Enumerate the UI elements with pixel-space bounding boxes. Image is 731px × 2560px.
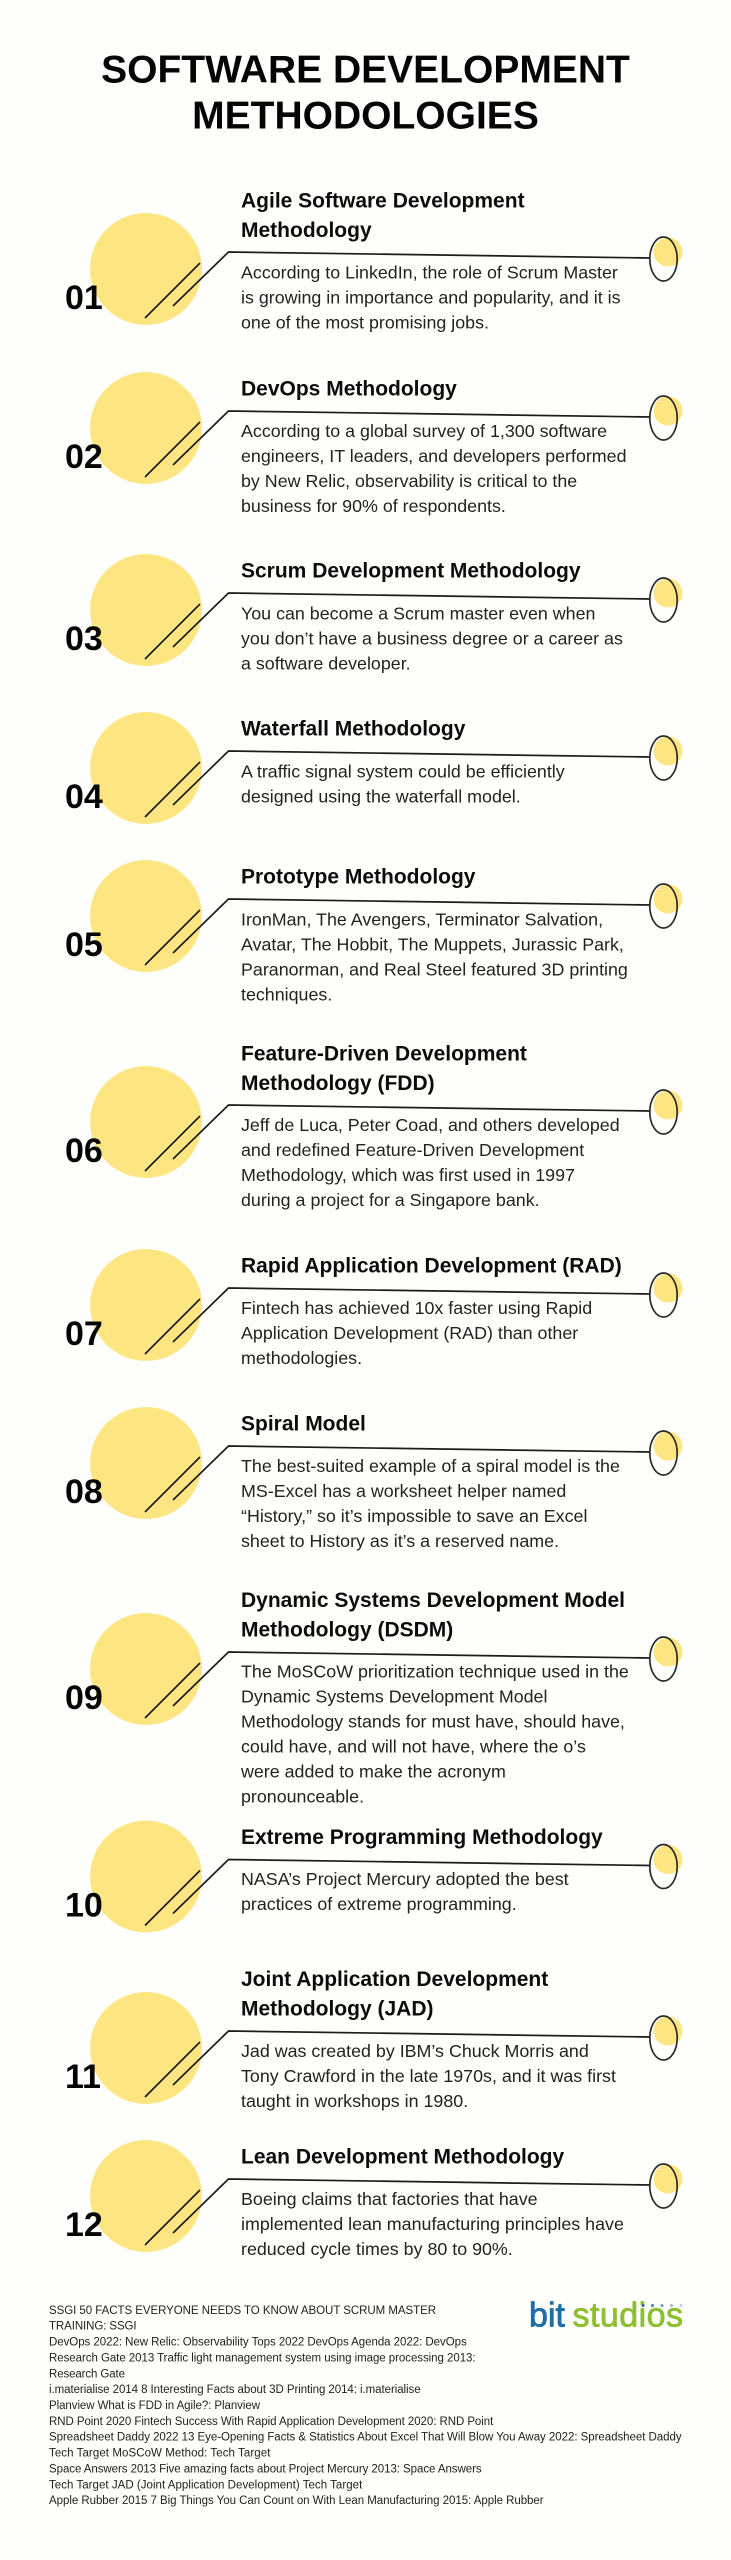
number: 04: 04: [65, 778, 103, 816]
body text: by New Relic, observability is critical to the: [241, 471, 577, 491]
body text: pronounceable.: [241, 1786, 364, 1806]
logo: bit studios: studios: [572, 2296, 683, 2334]
heading: Agile Software Development: [241, 190, 525, 212]
references: Space Answers 2013 Five amazing facts about Project Mercury 2013: Space Answers: [49, 2464, 482, 2476]
body text: sheet to History as it’s a reserved name.: [241, 1531, 559, 1551]
body text: MS-Excel has a worksheet helper named: [241, 1481, 566, 1501]
icon: end node: [650, 1844, 682, 1888]
number: 01: 01: [65, 279, 103, 317]
body text: implemented lean manufacturing principles have: [241, 2214, 624, 2234]
number: 09: 09: [65, 1679, 103, 1717]
icon: end node: [650, 578, 682, 622]
circle: yellow: [90, 1613, 202, 1725]
body text: The MoSCoW prioritization technique used in the: [241, 1662, 629, 1682]
references: [49, 2305, 682, 2507]
circle: yellow: [90, 1066, 202, 1178]
body text: techniques.: [241, 984, 332, 1004]
circle: yellow: [90, 2140, 202, 2252]
body text: designed using the waterfall model.: [241, 786, 521, 806]
references: Research Gate 2013 Traffic light management system using image processing 2013:: [49, 2352, 476, 2364]
panel: 03 Scrum: [65, 554, 682, 674]
body text: Jad was created by IBM’s Chuck Morris and: [241, 2041, 589, 2061]
body text: Tony Crawford in the late 1970s, and it was first: [241, 2066, 616, 2086]
icon: end node: [650, 736, 682, 780]
references: Apple Rubber 2015 7 Big Things You Can Count on With Lean Manufacturing 2015: Apple Rubber: [49, 2495, 544, 2507]
body text: practices of extreme programming.: [241, 1894, 517, 1914]
heading: Methodology (FDD): [241, 1072, 435, 1095]
body text: NASA’s Project Mercury adopted the best: [241, 1869, 569, 1889]
connector line: [145, 593, 650, 659]
body text: could have, and will not have, where the o’s: [241, 1736, 586, 1756]
connector line: [145, 1288, 650, 1354]
body text: Paranorman, and Real Steel featured 3D printing: [241, 960, 628, 980]
icon: end node: [650, 1090, 682, 1134]
body text: A traffic signal system could be efficiently: [241, 762, 565, 782]
body text: engineers, IT leaders, and developers performed: [241, 446, 627, 466]
icon: end node: [650, 2164, 682, 2208]
body text: were added to make the acronym: [240, 1762, 506, 1782]
number: 02: 02: [65, 438, 103, 476]
number: 03: 03: [65, 620, 103, 658]
icon: end node: [650, 884, 682, 928]
body text: you don’t have a business degree or a career as: [241, 628, 623, 648]
heading: Spiral Model: [241, 1412, 366, 1436]
heading: Methodology: [241, 219, 372, 242]
number: 11: 11: [65, 2058, 101, 2096]
body text: Boeing claims that factories that have: [241, 2189, 538, 2209]
panel: 10 Extreme Programming: [65, 1820, 682, 1932]
body text: is growing in importance and popularity, and it is: [241, 288, 621, 308]
heading: Methodology (DSDM): [241, 1618, 453, 1642]
body text: and redefined Feature-Driven Development: [241, 1140, 584, 1160]
body text: Methodology stands for must have, should have,: [241, 1712, 625, 1732]
circle: yellow: [90, 1820, 202, 1932]
panel: 05 Prototype: [65, 860, 682, 1004]
number: 12: 12: [65, 2206, 103, 2244]
panel: 02 DevOps: [65, 372, 682, 516]
connector line: [145, 2179, 650, 2245]
references: Planview What is FDD in Agile?: Planview: [49, 2400, 261, 2412]
icon: end node: [650, 2016, 682, 2060]
panel: 12 Lean: [65, 2140, 682, 2259]
circle: yellow: [90, 860, 202, 972]
connector line: [145, 1105, 650, 1171]
title: [101, 48, 630, 138]
body text: According to a global survey of 1,300 software: [241, 421, 607, 441]
icon: end node: [650, 1431, 682, 1475]
circle: yellow: [90, 1407, 202, 1519]
circle: yellow: [90, 1992, 202, 2104]
body text: one of the most promising jobs.: [241, 312, 489, 332]
connector line: [145, 1446, 650, 1512]
body text: IronMan, The Avengers, Terminator Salvation,: [241, 910, 603, 930]
panel: 07 RAD: [65, 1249, 682, 1368]
body text: methodologies.: [241, 1348, 362, 1368]
connector line: [145, 1860, 650, 1926]
connector line: [145, 252, 650, 318]
heading: DevOps Methodology: [241, 378, 457, 400]
body text: taught in workshops in 1980.: [241, 2091, 468, 2111]
heading: Methodology (JAD): [241, 1998, 433, 2020]
body text: reduced cycle times by 80 to 90%.: [241, 2239, 513, 2259]
heading: Waterfall Methodology: [241, 718, 466, 740]
body text: “History,” so it’s impossible to save an Excel: [241, 1506, 587, 1526]
body text: You can become a Scrum master even when: [241, 604, 595, 624]
references: Research Gate: [49, 2368, 125, 2380]
references: RND Point 2020 Fintech Success With Rapid Application Development 2020: RND Point: [49, 2416, 494, 2428]
circle: yellow: [90, 712, 202, 824]
panel: 08 Spiral: [65, 1407, 682, 1551]
heading: Dynamic Systems Development Model: [241, 1589, 625, 1612]
references: Tech Target JAD (Joint Application Development) Tech Target: [49, 2479, 363, 2491]
logo: bit studios: bit: [529, 2296, 566, 2334]
references: DevOps 2022: New Relic: Observability Tops 2022 DevOps Agenda 2022: DevOps: [49, 2336, 467, 2348]
body text: a software developer.: [241, 654, 411, 674]
number: 10: 10: [65, 1886, 103, 1924]
connector line: [145, 2031, 650, 2097]
connector line: [145, 1652, 650, 1718]
number: 06: 06: [65, 1132, 103, 1170]
body text: Avatar, The Hobbit, The Muppets, Jurassic Park,: [241, 934, 624, 954]
body text: business for 90% of respondents.: [241, 496, 506, 516]
heading: Extreme Programming Methodology: [241, 1826, 603, 1849]
connector line: [145, 899, 650, 965]
panel: 01 Agile: [65, 190, 682, 332]
icon: end node: [650, 237, 682, 281]
references: TRAINING: SSGI: [49, 2321, 137, 2333]
body text: The best-suited example of a spiral model is the: [241, 1456, 620, 1476]
body text: Application Development (RAD) than other: [241, 1323, 578, 1343]
number: 05: 05: [65, 926, 103, 964]
references: i.materialise 2014 8 Interesting Facts about 3D Printing 2014: i.materialise: [49, 2384, 421, 2396]
title: METHODOLOGIES: [192, 94, 539, 138]
icon: end node: [650, 1637, 682, 1681]
circle: yellow: [90, 372, 202, 484]
heading: Scrum Development Methodology: [241, 560, 581, 582]
panel: 09 DSDM: [65, 1589, 682, 1806]
heading: Rapid Application Development (RAD): [241, 1254, 622, 1278]
panel: 11 JAD: [65, 1968, 682, 2111]
title: SOFTWARE DEVELOPMENT: [101, 48, 630, 92]
icon: end node: [650, 1273, 682, 1317]
body text: Fintech has achieved 10x faster using Rapid: [241, 1298, 592, 1318]
body text: Jeff de Luca, Peter Coad, and others developed: [241, 1115, 620, 1135]
heading: Prototype Methodology: [241, 866, 476, 888]
icon: end node: [650, 396, 682, 440]
connector line: [145, 411, 650, 477]
references: Spreadsheet Daddy 2022 13 Eye-Opening Facts & Statistics About Excel That Will Blow You Away 2022: Spreadsheet Daddy: [49, 2432, 682, 2444]
circle: yellow: [90, 213, 202, 325]
number: 08: 08: [65, 1473, 103, 1511]
heading: Joint Application Development: [241, 1968, 548, 1991]
references: SSGI 50 FACTS EVERYONE NEEDS TO KNOW ABOUT SCRUM MASTER: [49, 2305, 436, 2317]
heading: Lean Development Methodology: [241, 2146, 565, 2168]
body text: Methodology, which was first used in 1997: [241, 1165, 575, 1185]
body text: during a project for a Singapore bank.: [241, 1190, 540, 1210]
heading: Feature-Driven Development: [241, 1042, 527, 1066]
panel: 06 Feature-Driven: [65, 1042, 682, 1210]
circle: yellow: [90, 1249, 202, 1361]
body text: According to LinkedIn, the role of Scrum Master: [241, 262, 618, 282]
circle: yellow: [90, 554, 202, 666]
connector line: [145, 751, 650, 817]
number: 07: 07: [65, 1315, 103, 1353]
body text: Dynamic Systems Development Model: [241, 1686, 547, 1706]
references: Tech Target MoSCoW Method: Tech Target: [49, 2448, 271, 2460]
panel: 04 Waterfall: [65, 712, 682, 824]
